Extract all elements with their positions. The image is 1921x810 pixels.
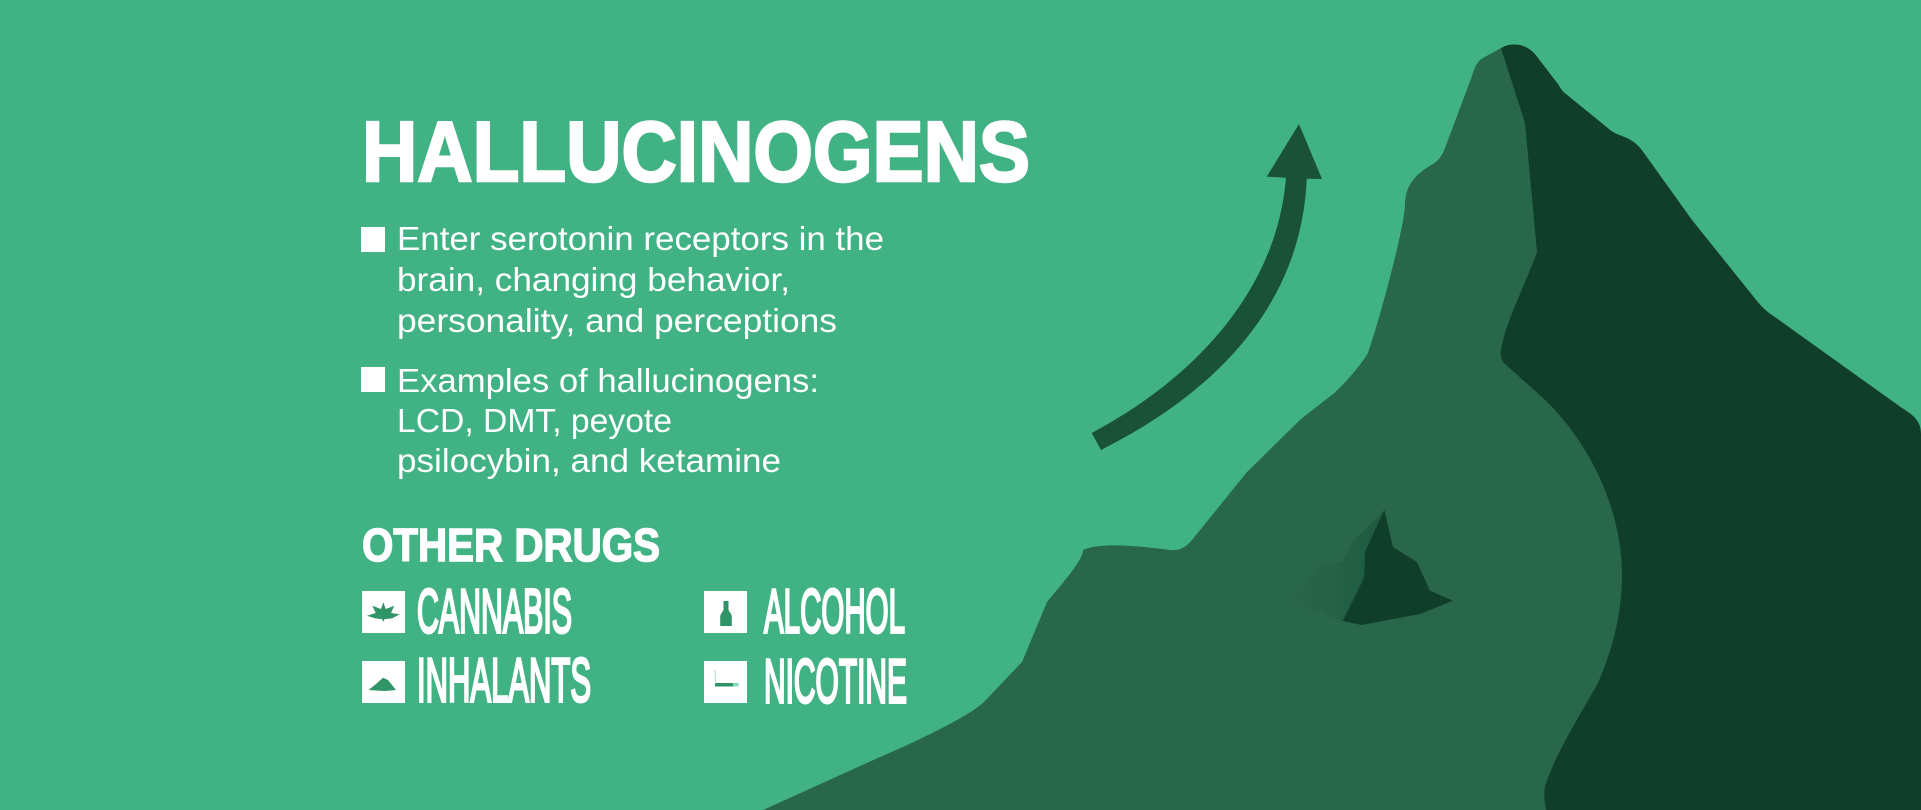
bullet text: serotonin: brain, changing behavior, xyxy=(397,262,790,299)
bullet marker xyxy=(361,227,385,252)
label: inhalants: INHALANTS xyxy=(417,646,591,716)
text: NICOTINE xyxy=(764,648,907,716)
mountain: shadow face xyxy=(1501,44,1921,810)
icon: cigarette xyxy=(704,661,747,703)
bullet text: examples: psilocybin, and ketamine xyxy=(397,443,781,480)
title: HALLUCINOGENS xyxy=(362,105,1030,200)
small peak: shadow facet xyxy=(1343,510,1453,625)
illustration: mountain xyxy=(763,44,1921,810)
text: ALCOHOL xyxy=(764,578,905,646)
bullet text: examples xyxy=(397,363,819,480)
bullet text: examples: LCD, DMT, peyote xyxy=(397,403,672,440)
bullet text: serotonin: personality, and perceptions xyxy=(397,303,837,340)
icon: cannabis leaf xyxy=(362,591,405,633)
bullet text: serotonin xyxy=(397,221,884,340)
bullet list: effects xyxy=(361,221,884,480)
heading: other drugs: OTHER DRUGS xyxy=(362,519,660,571)
mountain: lit face xyxy=(763,48,1650,810)
bullet text: examples: Examples of hallucinogens: xyxy=(397,363,819,400)
small peak: lit facet xyxy=(1287,510,1384,621)
bullet text: serotonin: Enter serotonin receptors in the xyxy=(397,221,884,258)
icon: inhalant powder xyxy=(362,661,405,703)
other drugs list: CANNABIS xyxy=(417,578,572,646)
icon: bottle xyxy=(704,591,747,633)
other drugs list xyxy=(362,578,907,716)
arrow: upward curve xyxy=(1092,124,1322,450)
bullet marker xyxy=(361,367,385,392)
